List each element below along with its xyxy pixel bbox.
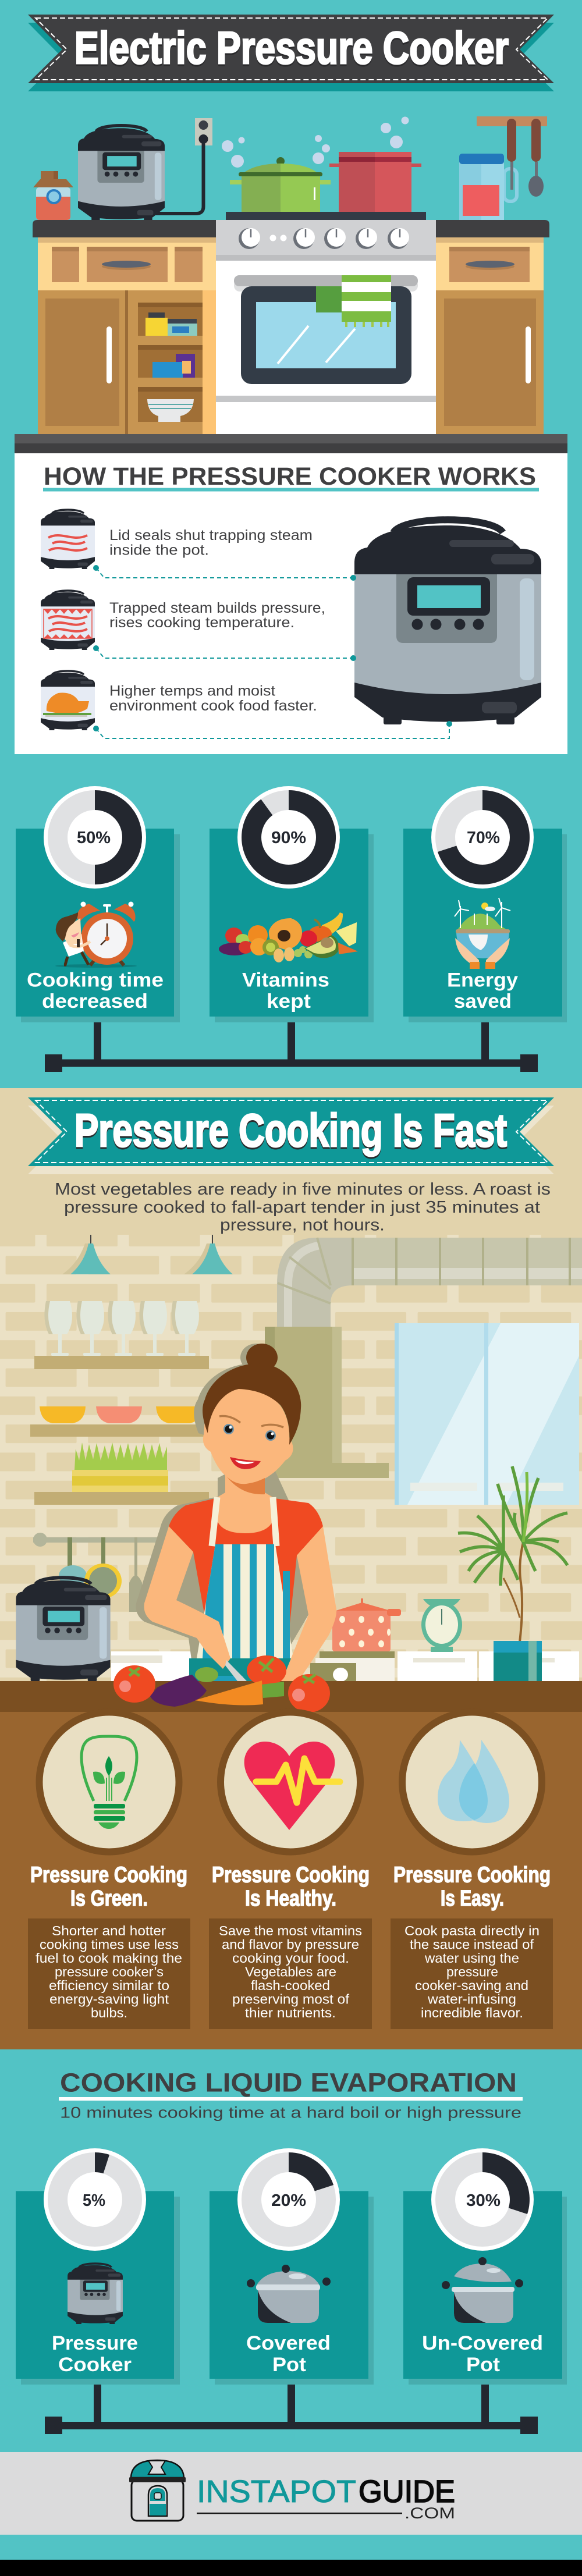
bowls (40, 1406, 203, 1423)
icon: pressure cooker (68, 2264, 123, 2324)
connector lines (96, 568, 449, 738)
evaporation card: pressure cooker (16, 2148, 180, 2385)
icon: steam bubbles (222, 116, 409, 168)
benefit: healthy: Vegetables are (245, 1964, 336, 1980)
brown benefits panel (0, 1708, 582, 2049)
benefit: green: cooking times use less (40, 1937, 179, 1952)
panel: stove and oven (216, 212, 436, 434)
step 2 (41, 591, 325, 650)
wine glasses (44, 1301, 199, 1356)
stat card: energy (403, 786, 567, 1022)
icon: wall outlet and cord (152, 118, 212, 214)
icon: bowl on shelf (147, 399, 194, 422)
window (395, 1323, 579, 1505)
grass planter (72, 1442, 168, 1492)
benefit: easy: water using the (424, 1950, 519, 1966)
woman neck and chest (215, 1472, 275, 1533)
stat card: vitamins (210, 786, 374, 1022)
stat card: energy: saved (454, 990, 512, 1012)
benefit: healthy: Is Healthy. (245, 1886, 336, 1911)
icon: earth in hands (455, 898, 510, 969)
donut 50%: 50% (77, 829, 111, 847)
intro text (55, 1180, 551, 1235)
kitchen illustration (15, 116, 567, 453)
left pressure cooker (16, 1577, 111, 1681)
benefit: green: pressure cooker’s (55, 1964, 164, 1980)
benefit: green: bulbs. (91, 2005, 127, 2020)
benefit: easy: incredible flavor. (421, 2005, 523, 2020)
icon: water drops (438, 1740, 509, 1823)
polka dot pot (332, 1598, 401, 1651)
benefit: healthy: Pressure Cooking (212, 1863, 370, 1887)
step 1: inside the pot. (109, 542, 209, 559)
logo wordmark: GUIDE (359, 2474, 455, 2509)
icon: red pot (329, 152, 421, 212)
bottom black bar (0, 2560, 582, 2576)
kitchen scale (421, 1599, 462, 1652)
stand bar (45, 1022, 538, 1072)
shelf with glasses (34, 1356, 209, 1369)
step 2: Trapped steam builds pressure, (109, 600, 325, 616)
title banner (28, 15, 554, 91)
woman shirt (169, 1498, 323, 1623)
benefit: green: energy-saving light (49, 1991, 169, 2006)
benefit: easy (391, 1708, 553, 2029)
icon: fruit and vegetables (219, 912, 358, 962)
icon: heart with pulse (244, 1742, 340, 1830)
big pressure cooker (354, 520, 541, 724)
evaporation card: covered pot: Pot (272, 2354, 306, 2376)
icon: pitcher (452, 154, 517, 220)
evaporation card: covered pot: Covered (246, 2332, 331, 2354)
benefit: green: Shorter and hotter (52, 1923, 166, 1938)
floor bar (15, 434, 567, 453)
donut 20%: 20% (271, 2191, 306, 2210)
icon: pressure cooker on counter (78, 126, 165, 221)
stat card: cooking time: decreased (42, 990, 148, 1012)
step 1 (41, 510, 313, 569)
step 3: environment cook food faster. (109, 698, 317, 714)
shelf with planter (34, 1492, 209, 1505)
icon: towel (316, 275, 391, 327)
potted plant (458, 1466, 567, 1681)
evaporation card: pressure cooker: Cooker (58, 2354, 132, 2376)
stat card: vitamins: kept (267, 990, 311, 1012)
icon: covered pot (247, 2265, 331, 2323)
evaporation heading: COOKING LIQUID EVAPORATION (60, 2068, 517, 2098)
benefit: healthy: cooking your food. (232, 1950, 349, 1966)
benefit: easy: Pressure Cooking (393, 1863, 551, 1887)
footer logo band (0, 2452, 582, 2535)
woman head (203, 1344, 301, 1494)
evaporation card: uncovered pot: Pot (466, 2354, 500, 2376)
evaporation card: covered pot (210, 2148, 374, 2385)
donut 70%: 70% (467, 829, 500, 847)
lower stand bar (45, 2385, 538, 2434)
woman right arm (260, 1526, 336, 1699)
donut 20% (237, 2148, 340, 2251)
vegetables and knife (113, 1655, 330, 1712)
benefit: green (28, 1708, 190, 2029)
benefit: healthy: flash-cooked (251, 1978, 330, 1993)
logo wordmark: INSTAPOT (197, 2474, 356, 2509)
intro text: Most vegetables are ready in five minutes or less. A roast is (55, 1180, 551, 1199)
step 2: rises cooking temperature. (109, 614, 294, 631)
benefit: green: Is Green. (70, 1886, 148, 1911)
heading: HOW THE PRESSURE COOKER WORKS (44, 463, 536, 491)
intro text: pressure, not hours. (220, 1216, 385, 1235)
apron (189, 1497, 293, 1681)
benefit: easy: water-infusing (427, 1991, 516, 2006)
benefit: healthy (209, 1708, 372, 2029)
duct (277, 1238, 582, 1327)
donut 5% (44, 2148, 146, 2251)
section banner (28, 1097, 554, 1174)
evaporation card: uncovered pot (403, 2148, 567, 2385)
shelf with bowls (30, 1424, 205, 1437)
icon: alarm clock and man (55, 902, 137, 968)
panel: left counter and cabinet (33, 220, 216, 434)
evaporation card: uncovered pot: Un-Covered (422, 2332, 543, 2354)
counter top (0, 1681, 582, 1712)
step 3 (41, 671, 317, 730)
benefit: green: fuel to cook making the (36, 1950, 182, 1966)
icon: stove knobs (239, 228, 409, 249)
benefit: healthy: and flavor by pressure (222, 1937, 359, 1952)
evaporation heading: 10 minutes cooking time at a hard boil or high pressure (60, 2104, 521, 2122)
donut 50% (44, 786, 146, 889)
benefit: healthy: preserving most of (232, 1991, 350, 2006)
stat card: cooking time (16, 786, 180, 1022)
icon: light bulb with leaves (81, 1736, 137, 1829)
stat card: vitamins: Vitamins (242, 969, 329, 992)
logo wordmark (197, 2474, 455, 2522)
step 1: Lid seals shut trapping steam (109, 527, 313, 543)
donut 5%: 5% (83, 2191, 105, 2210)
white base cabinets (111, 1651, 579, 1682)
hood column (265, 1327, 389, 1478)
donut 90%: 90% (271, 829, 306, 847)
icon: jar (33, 171, 73, 220)
benefit: healthy: thier nutrients. (245, 2005, 336, 2020)
evaporation section background (0, 2049, 582, 2560)
step 3: Higher temps and moist (109, 683, 275, 699)
benefit: easy: Is Easy. (441, 1886, 504, 1911)
logo wordmark: .COM (404, 2504, 455, 2522)
stat card: energy: Energy (447, 969, 518, 992)
icon: uncovered pot (442, 2257, 523, 2323)
hanging rail and utensils (33, 1533, 164, 1612)
benefit: healthy: Save the most vitamins (219, 1923, 362, 1938)
woman (136, 1344, 336, 1699)
evaporation card: pressure cooker: Pressure (52, 2332, 138, 2354)
benefit: green: efficiency similar to (49, 1978, 169, 1993)
icon: hanging utensils (477, 116, 547, 197)
donut 70% (431, 786, 534, 889)
evaporation heading (59, 2068, 523, 2122)
bottom teal strip (0, 2535, 582, 2560)
woman shadow (136, 1344, 308, 1664)
kitchen scene (0, 1235, 582, 1712)
beige wall section (0, 1088, 582, 1682)
intro text: pressure cooked to fall-apart tender in just 35 minutes at (64, 1198, 540, 1217)
panel: right counter and cabinet (436, 220, 549, 434)
stat card: cooking time: Cooking time (27, 969, 164, 992)
donut 30%: 30% (466, 2191, 501, 2210)
benefit: easy: Cook pasta directly in (404, 1923, 540, 1938)
teal header background (0, 0, 582, 1088)
pendant lamps (62, 1235, 233, 1274)
donut 90% (237, 786, 340, 889)
panel: how the pressure cooker works (15, 453, 567, 754)
benefit: easy: pressure (446, 1964, 498, 1980)
woman left arm (144, 1526, 230, 1669)
logo icon (129, 2460, 186, 2521)
benefit: easy: the sauce instead of (410, 1937, 534, 1952)
benefit: green: Pressure Cooking (30, 1863, 187, 1887)
benefit: easy: cooker-saving and (415, 1978, 528, 1993)
donut 30% (431, 2148, 534, 2251)
icon: jars on shelf (146, 312, 197, 378)
icon: green pot (230, 157, 331, 212)
